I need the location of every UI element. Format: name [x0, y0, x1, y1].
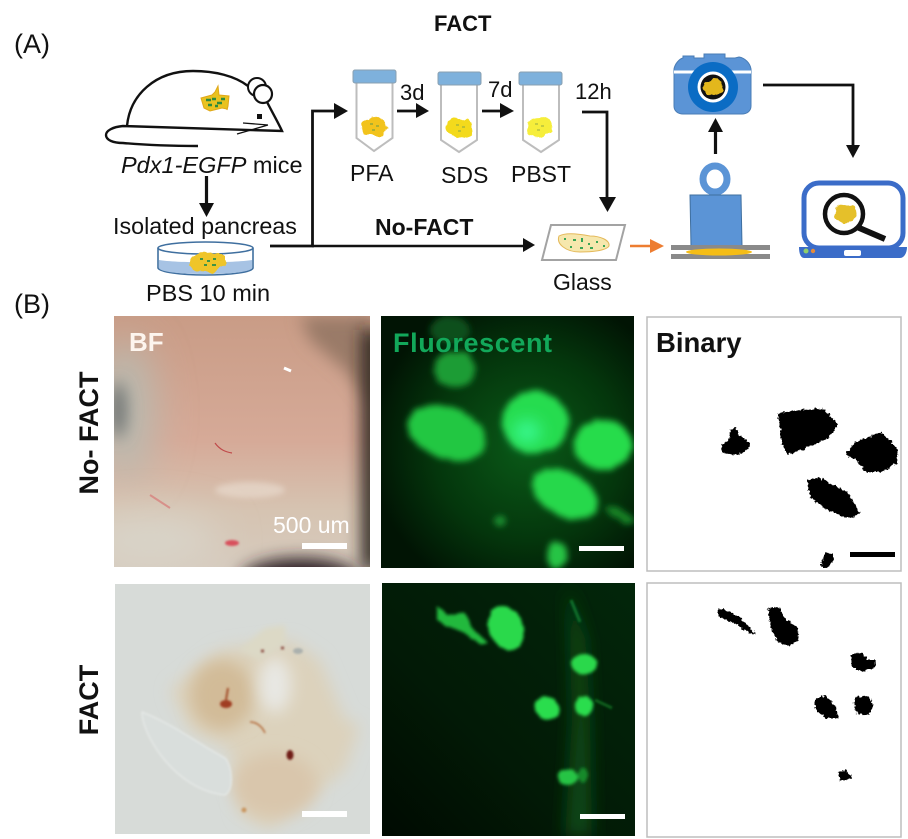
arrow: 12h to glass: [582, 112, 616, 212]
heading: FACT: FACT: [434, 11, 492, 36]
label: No-FACT: No-FACT: [375, 214, 473, 240]
icon: petri dish: [158, 242, 253, 275]
tube: SDS: [438, 72, 481, 152]
icon: weight on slide: [671, 166, 770, 259]
arrow: 3d: [397, 103, 429, 118]
label: 12h: 12h: [575, 79, 612, 104]
scale text: 500 um: 500 um: [273, 512, 350, 538]
label: SDS: SDS: [441, 162, 488, 188]
arrow: No-FACT to glass: [312, 238, 535, 252]
scale bar: [302, 811, 347, 817]
label: Pdx1-EGFP mice: Pdx1-EGFP mice: [121, 152, 303, 178]
label: PBST: PBST: [511, 161, 571, 187]
label: 7d: 7d: [488, 77, 512, 102]
scale bar: [579, 546, 624, 551]
label: Glass: Glass: [553, 269, 612, 295]
arrow: mice to pancreas: [199, 176, 214, 217]
heading: BF: BF: [129, 327, 164, 357]
panel: binary FACT: [647, 583, 901, 837]
scale bar: [580, 814, 625, 819]
arrow: weight to camera: [708, 118, 723, 154]
arrow: camera to laptop: [763, 85, 860, 158]
image: fluorescent FACT: [382, 583, 635, 836]
tube: PFA: [353, 70, 396, 151]
image: brightfield FACT: [115, 584, 370, 834]
icon: laptop with magnifier: [799, 183, 907, 258]
label: PFA: PFA: [350, 160, 394, 186]
icon: mouse: [106, 71, 282, 146]
panel: binary No-FACT: [647, 317, 901, 571]
arrow: orange: [630, 239, 664, 253]
arrow: to FACT branch: [270, 103, 348, 246]
tube: PBST: [519, 72, 562, 152]
heading: Fluorescent: Fluorescent: [393, 328, 553, 358]
image: brightfield No-FACT: [114, 316, 370, 567]
scale bar: [302, 543, 347, 549]
panel label: B: (B): [14, 289, 50, 319]
heading: Binary: Binary: [656, 327, 742, 358]
icon: glass slide: [542, 225, 625, 260]
icon: camera: [674, 54, 751, 114]
label: PBS 10 min: PBS 10 min: [146, 280, 270, 306]
arrow: 7d: [482, 103, 514, 118]
label: 3d: 3d: [400, 80, 424, 105]
panel label: A: (A): [14, 29, 50, 59]
scale bar: [850, 552, 895, 557]
row label: No-FACT: No- FACT: [74, 371, 104, 494]
label: Isolated pancreas: Isolated pancreas: [113, 213, 297, 239]
image: fluorescent No-FACT: [381, 316, 636, 568]
row label: FACT: FACT: [74, 664, 104, 735]
